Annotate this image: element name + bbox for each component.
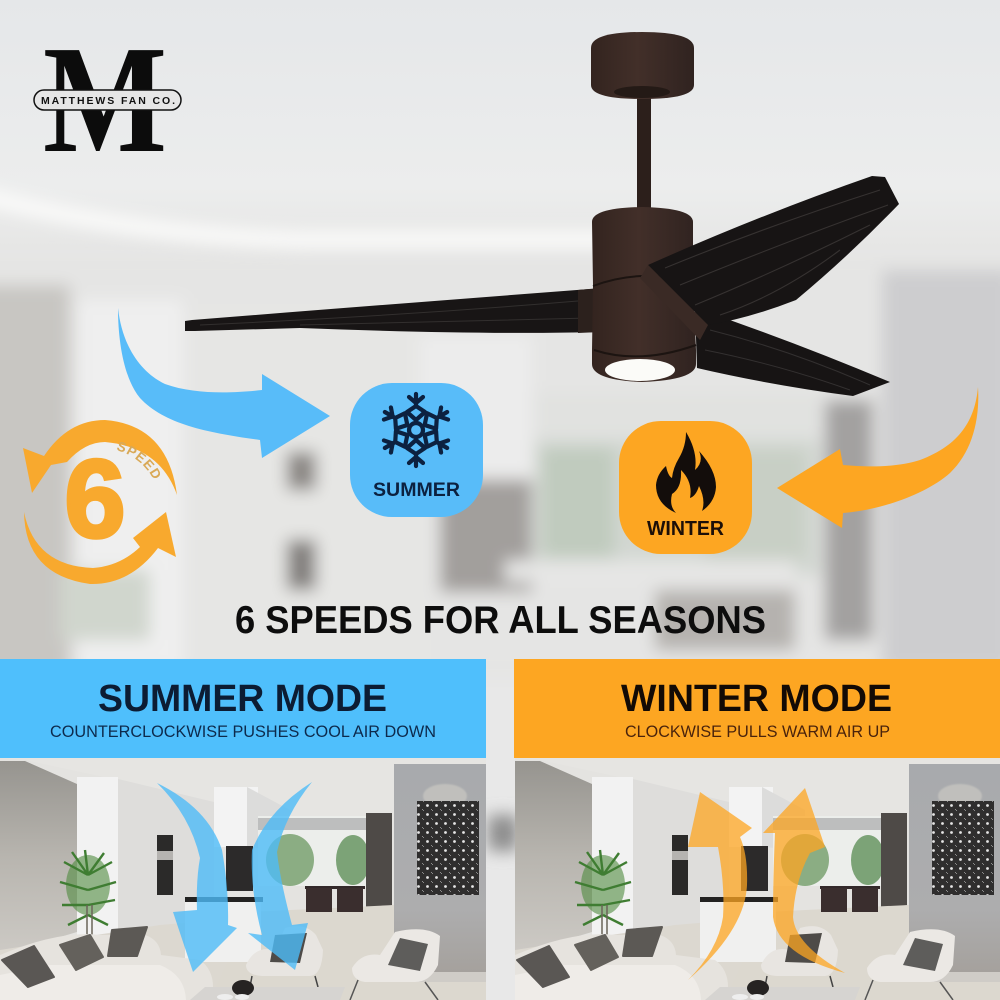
badge: winter: WINTER (647, 518, 725, 540)
canopy and downrod (591, 32, 694, 210)
arrow: warm air right (763, 788, 845, 973)
icon: 6 speed (23, 420, 177, 584)
icon: 6 speed: 6 (64, 438, 126, 561)
panel: winter mode (514, 659, 1000, 758)
room photo: winter (515, 758, 1000, 1000)
blade: lower right (695, 308, 890, 396)
panel: winter mode: CLOCKWISE PULLS WARM AIR UP (625, 722, 890, 741)
icon: 6 speed: SPEED (117, 442, 160, 478)
arrow: upper arc (23, 420, 177, 495)
badge: winter (619, 421, 752, 554)
arrow: lower arc (24, 512, 176, 584)
heading: 6 SPEEDS FOR ALL SEASONS (235, 599, 766, 642)
ceiling fan (185, 32, 899, 396)
arrow: cool air left (157, 783, 237, 972)
panel: summer mode (0, 659, 486, 758)
arrow: blue to summer (118, 308, 330, 458)
icon: snowflake (380, 394, 452, 466)
badge: summer: SUMMER (373, 480, 460, 501)
logo: Matthews Fan Co.: M (43, 15, 167, 185)
blade: left (185, 288, 600, 333)
panel: summer mode: COUNTERCLOCKWISE PUSHES COOL AIR DOWN (50, 722, 436, 741)
panel: summer mode: SUMMER MODE (98, 678, 387, 720)
room photo: summer (0, 758, 500, 1000)
logo: Matthews Fan Co.: MATTHEWS FAN CO. (41, 95, 175, 107)
motor housing (592, 207, 696, 382)
light (605, 359, 675, 381)
arrow: warm air left (688, 792, 752, 980)
arrow: cool air right (248, 782, 312, 970)
icon: flame (656, 432, 716, 513)
badge: summer (350, 383, 483, 517)
panel: winter mode: WINTER MODE (621, 678, 892, 720)
blade: upper right (640, 176, 899, 340)
arrow: orange to winter (777, 387, 978, 528)
